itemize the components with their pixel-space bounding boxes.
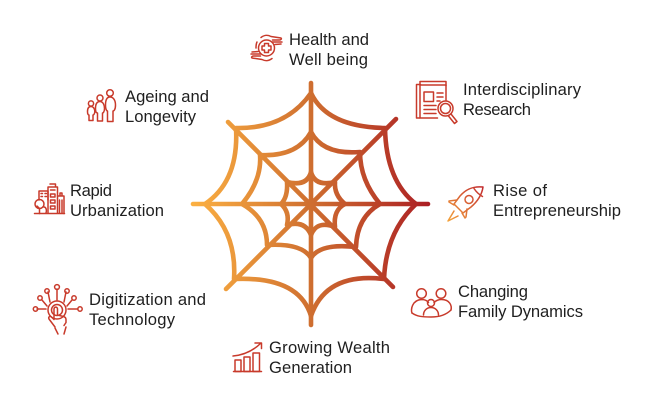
icon: touch with network nodes [33, 285, 82, 334]
icon: rising bar chart [233, 343, 262, 372]
icon: documents with magnifier [416, 82, 457, 124]
item: digitization and technology: Technology [89, 310, 176, 329]
icon: family group [411, 289, 451, 317]
label: rapid urbanization: Rapid [70, 181, 112, 200]
icon: hands holding medical cross [251, 35, 282, 61]
item: rise of entrepreneurship [448, 181, 621, 221]
item: ageing and longevity: Longevity [125, 107, 197, 126]
label: changing family dynamics: Changing [458, 282, 528, 301]
item: interdisciplinary research: Research [463, 100, 531, 119]
item: interdisciplinary research [416, 80, 582, 124]
item: growing wealth generation [233, 338, 390, 377]
icon: rocket [448, 187, 483, 221]
label: interdisciplinary research: Interdisciplinary [463, 80, 582, 99]
item: rapid urbanization [34, 181, 164, 220]
item: changing family dynamics: Family Dynamics [458, 302, 583, 321]
item: ageing and longevity [88, 87, 209, 126]
item: changing family dynamics [411, 282, 583, 321]
item: digitization and technology [33, 285, 206, 334]
label: digitization and technology: Digitization and [89, 290, 206, 309]
item: health and well being: Well being [289, 50, 368, 69]
label: growing wealth generation: Growing Wealth [269, 338, 390, 357]
item: growing wealth generation: Generation [269, 358, 352, 377]
label: health and well being: Health and [289, 30, 369, 49]
icon: city buildings and tree [34, 184, 64, 214]
spider web graphic [193, 83, 428, 325]
label: ageing and longevity: Ageing and [125, 87, 209, 106]
item: rise of entrepreneurship: Entrepreneurship [493, 201, 621, 220]
item: health and well being [251, 30, 369, 69]
item: rapid urbanization: Urbanization [70, 201, 164, 220]
icon: three people [88, 90, 116, 122]
label: rise of entrepreneurship: Rise of [493, 181, 547, 200]
